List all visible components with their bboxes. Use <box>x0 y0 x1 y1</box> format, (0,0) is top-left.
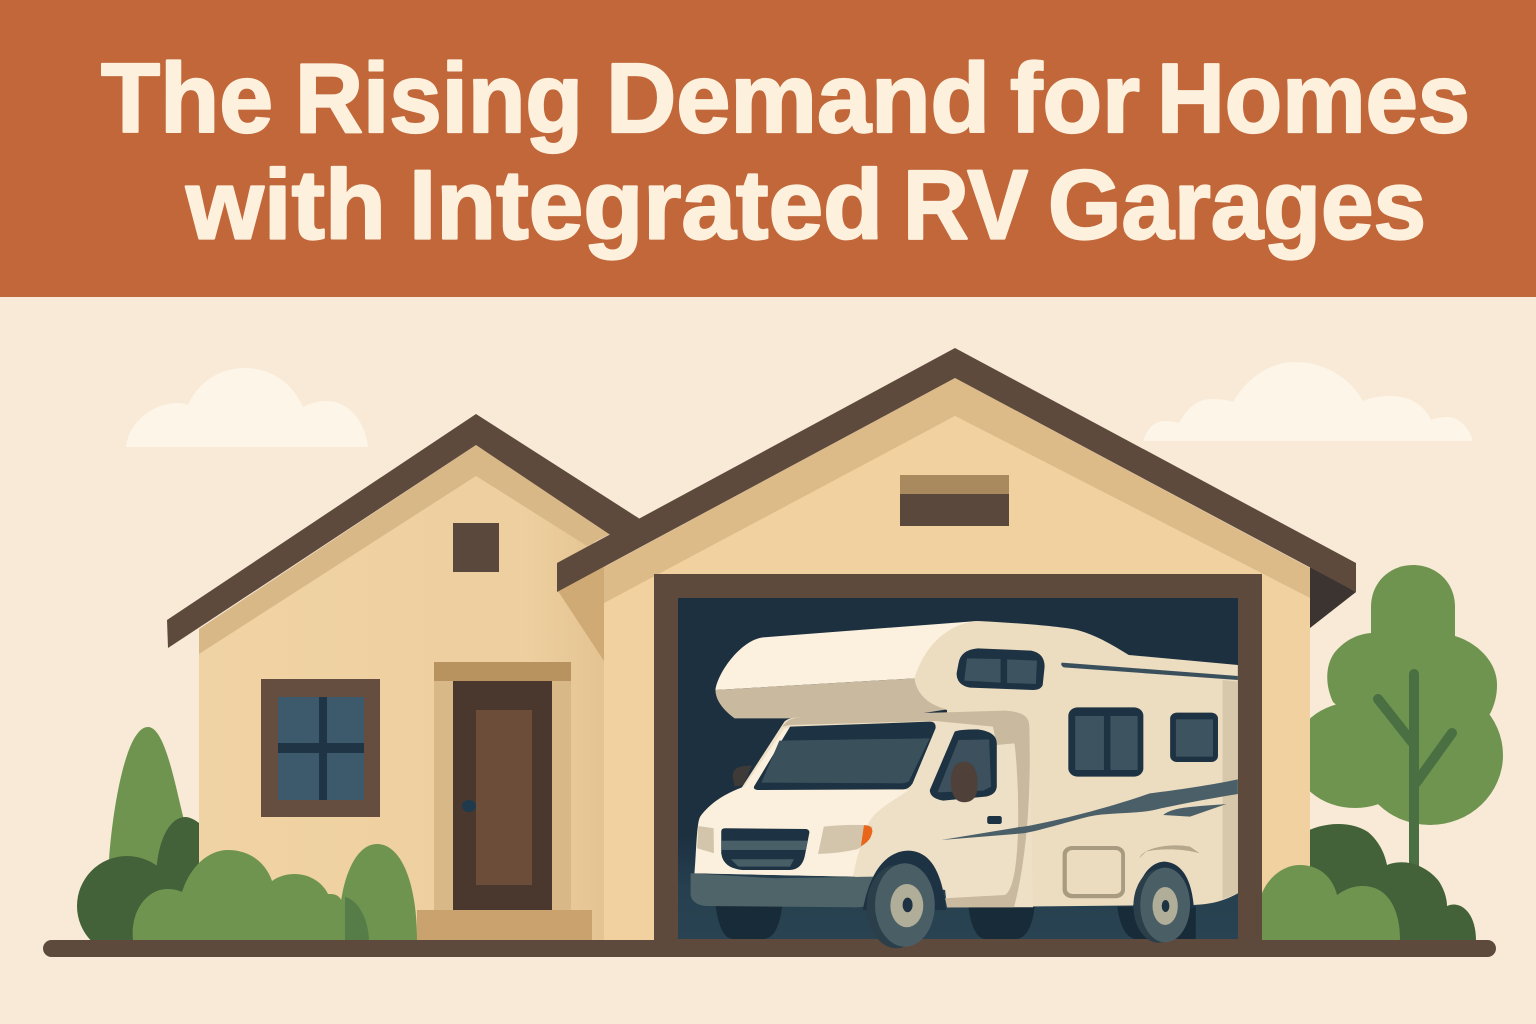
dark bushes right <box>1300 824 1476 940</box>
tree foliage <box>1293 565 1503 825</box>
side stripe <box>941 779 1238 840</box>
wheel arch trim <box>1139 845 1200 858</box>
left house fascia <box>199 445 610 654</box>
left house roof <box>167 414 640 648</box>
windshield <box>754 722 936 790</box>
headlight <box>818 825 872 854</box>
cloud right <box>1143 362 1473 441</box>
hood <box>694 728 909 877</box>
garage wall <box>604 416 1310 940</box>
tall cone tree <box>109 727 185 870</box>
door handle <box>987 816 1002 824</box>
gable vent <box>453 523 499 572</box>
ground line <box>43 940 1496 957</box>
title: Rising <box>295 43 583 153</box>
front wheel <box>863 851 946 948</box>
rear shaded edge <box>1223 680 1238 899</box>
title: Garages <box>1048 150 1426 260</box>
tire shadows <box>715 903 1196 939</box>
marker light <box>697 826 714 853</box>
garage fascia <box>604 378 1310 603</box>
storage hatch <box>1063 846 1125 898</box>
left house wall <box>199 470 606 940</box>
under-eave shadow <box>1310 566 1356 628</box>
RV <box>691 621 1238 948</box>
rear wheel <box>1133 862 1194 943</box>
junction shadow <box>558 567 604 661</box>
dark bushes <box>77 817 199 956</box>
left house <box>167 414 640 940</box>
title: Integrated <box>409 150 883 260</box>
front step <box>417 910 592 940</box>
roof stripe <box>1061 663 1238 680</box>
title: The <box>101 43 273 153</box>
tree trunk and branches <box>1378 674 1452 870</box>
header banner <box>0 0 1536 297</box>
cab door <box>694 712 1033 907</box>
title: RV <box>903 150 1028 260</box>
rear body <box>914 621 1238 907</box>
side window small <box>1170 713 1218 762</box>
overcab top <box>715 621 978 690</box>
garage roof <box>557 348 1356 592</box>
front door <box>434 662 571 911</box>
far mirror <box>733 766 752 787</box>
side mirror <box>951 762 978 802</box>
pillar shade <box>782 711 1030 907</box>
overcab window <box>957 648 1045 690</box>
title: Demand <box>606 43 990 153</box>
garage interior <box>678 598 1238 939</box>
garage door frame <box>654 574 1262 940</box>
overcab underside <box>715 678 947 718</box>
front window <box>261 679 380 817</box>
small stripe accent <box>1163 804 1226 817</box>
title: for <box>1010 43 1140 153</box>
tree right <box>1293 565 1503 870</box>
attic vent <box>900 475 1009 526</box>
cloud left <box>126 368 368 447</box>
light bushes right <box>1262 865 1400 940</box>
light bushes left <box>133 844 417 940</box>
cab side window <box>930 729 997 801</box>
garage section <box>557 348 1356 940</box>
bumper <box>691 873 874 907</box>
title <box>101 43 1470 260</box>
grille <box>717 828 813 870</box>
title: with <box>185 150 386 260</box>
bushes left back <box>77 727 199 956</box>
side window large <box>1068 707 1143 777</box>
title: Homes <box>1157 43 1470 153</box>
